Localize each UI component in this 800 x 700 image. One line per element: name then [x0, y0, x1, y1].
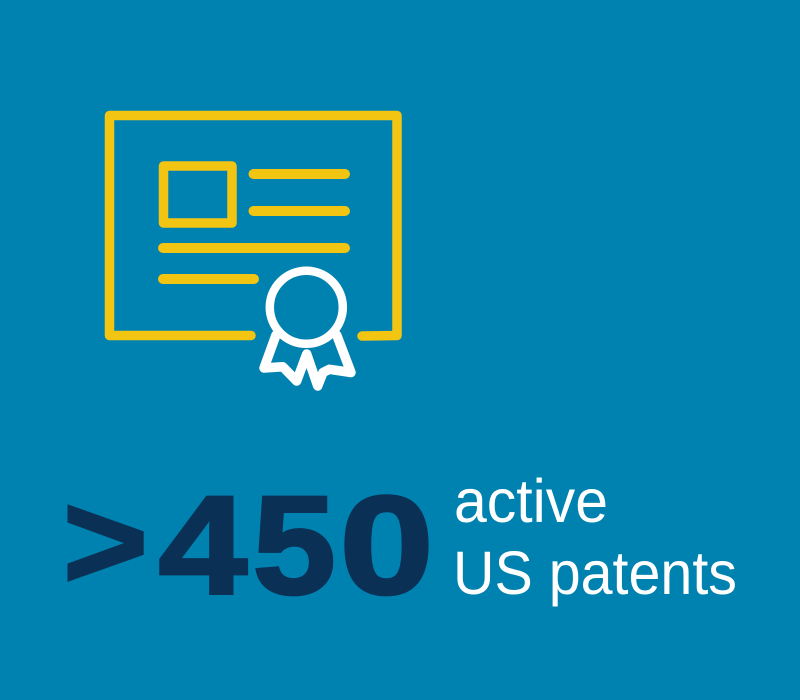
certificate photo square	[164, 166, 232, 223]
statistic: greater than 450: >	[63, 465, 148, 617]
caption: active US patents: active	[454, 467, 608, 535]
statistic: greater than 450: 5	[252, 467, 336, 623]
statistic: greater than 450	[63, 465, 434, 623]
statistic: greater than 450: 4	[158, 467, 247, 623]
certificate text lines	[163, 174, 345, 279]
statistic: greater than 450: 0	[340, 466, 434, 623]
icon: award seal	[264, 271, 351, 386]
icon: patent certificate	[110, 116, 397, 386]
certificate frame	[110, 116, 397, 336]
caption: active US patents	[453, 467, 737, 607]
caption: active US patents: US patents	[453, 539, 737, 607]
